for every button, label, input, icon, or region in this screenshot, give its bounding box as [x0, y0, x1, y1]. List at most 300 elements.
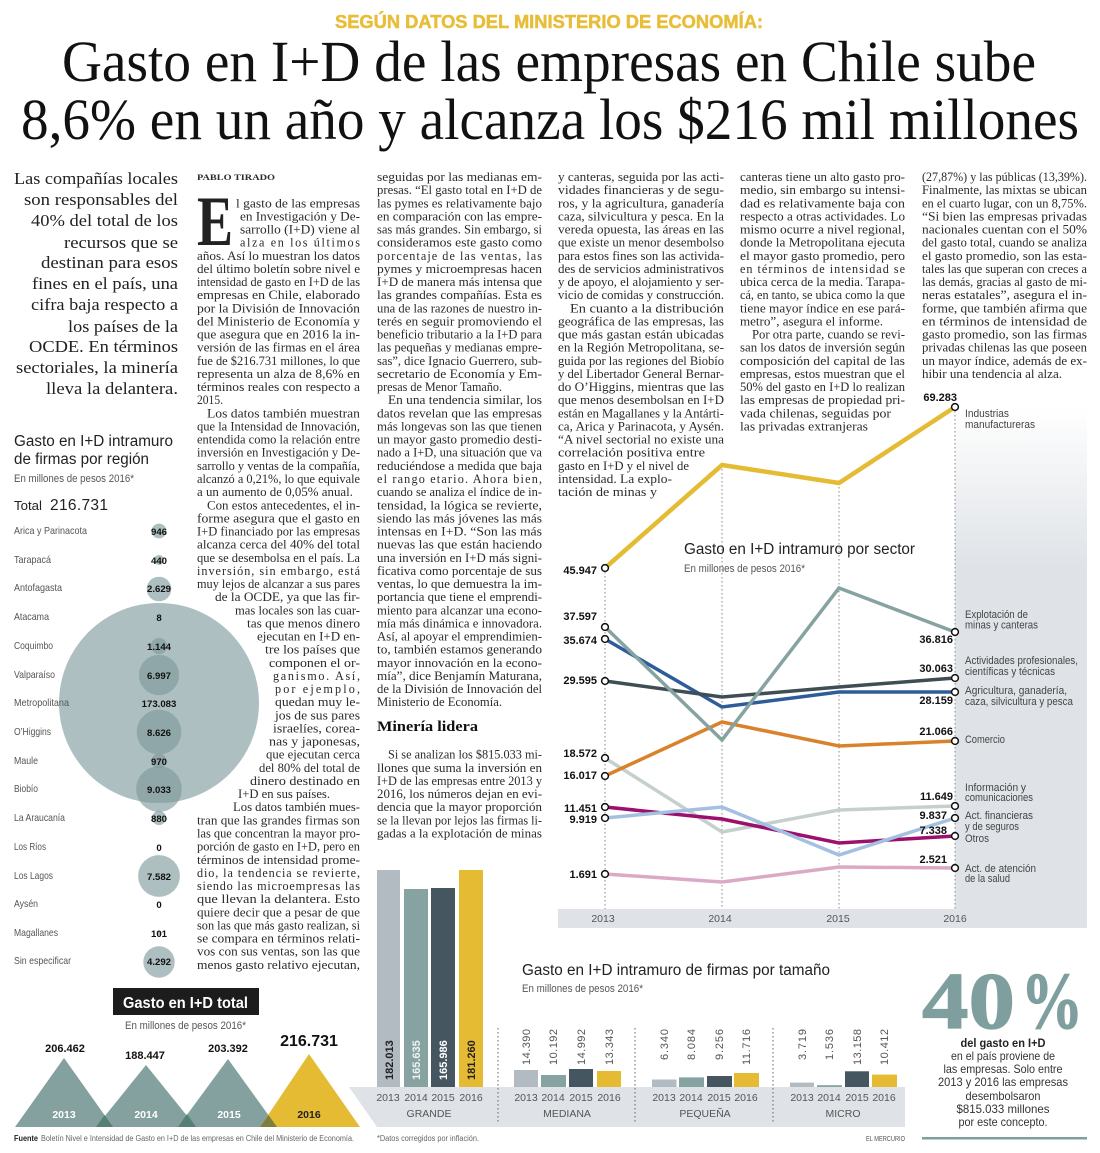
article column 5: (27,87%) y las públicas (13,39%).: [922, 170, 1087, 184]
article column 2: mayor innovación en la econo-: [377, 656, 542, 670]
size years and groups: 2014: [404, 1092, 428, 1104]
article column 5: el gasto promedio, son las esta-: [922, 249, 1087, 263]
article column 1: quiere decir que a pesar de que: [197, 905, 360, 919]
bars: micro: 3.719: [797, 1029, 809, 1060]
sector labels: comunicaciones: [965, 792, 1033, 804]
article column 4: Por otra parte, cuando se revi-: [752, 328, 905, 342]
size years and groups: 2016: [872, 1092, 896, 1104]
article column 1: componen el or-: [269, 656, 360, 670]
2016 values: 7.338: [919, 825, 947, 837]
article column 3: y canteras, seguida por las acti-: [558, 170, 724, 184]
bars: grande: 182.013: [384, 1040, 396, 1080]
sector labels: Act. financieras: [965, 810, 1033, 822]
panel: total spending triangles: [15, 988, 360, 1127]
article column 3: ros, y la agricultura, ganadería: [558, 196, 725, 210]
article column 2: I+D de las empresas entre 2013 y: [377, 774, 543, 788]
intro paragraph: cifra baja respecto a: [31, 295, 178, 314]
article column 5: un mayor índice, además de ex-: [922, 354, 1087, 368]
article column 4: mismo ocurre a nivel regional,: [740, 222, 905, 236]
article column 1: siendo las microempresas las: [197, 879, 360, 893]
article column 1: mas locales son las cuar-: [235, 603, 360, 617]
callout text: $815.033 millones: [956, 1102, 1050, 1116]
bars: grande: 165.986: [438, 1040, 450, 1080]
article column 2: el rango etario. Ahora bien,: [377, 472, 542, 486]
region values: 2.629: [147, 584, 171, 595]
region names: Sin especificar: [14, 955, 71, 967]
article column 1: las que concentran la mayor pro-: [197, 826, 360, 840]
article column 3: que existe un menor desembolso: [558, 236, 724, 250]
article column 4: respecto a otras actividades. Lo: [740, 209, 905, 223]
article column 2: una inversión en I+D más signi-: [377, 551, 542, 565]
bars: pequeña: 9.256: [714, 1029, 726, 1060]
sector labels: Actividades profesionales,: [965, 655, 1078, 667]
sector labels: Act. de atención: [965, 863, 1036, 875]
sector labels: y de seguros: [965, 821, 1019, 833]
intro paragraph: 40% del total de los: [31, 211, 178, 230]
total heading box: [113, 988, 259, 1015]
size years and groups: 2013: [376, 1092, 400, 1104]
article column 2: sas más grandes. Sin embargo, si: [377, 222, 543, 236]
article column 3: [558, 170, 725, 499]
article column 1: alza en los últimos: [240, 236, 360, 250]
series lines: [605, 407, 955, 882]
2013 values: 1.691: [569, 869, 597, 881]
region names: Valparaíso: [14, 669, 55, 681]
total values: 203.392: [208, 1043, 248, 1055]
region values: 0: [156, 843, 162, 854]
credit: EL MERCURIO: [866, 1136, 905, 1143]
region values: 0: [156, 900, 162, 911]
sector labels: manufactureras: [965, 419, 1035, 431]
article column 5: forme, que también afirma que: [922, 301, 1087, 315]
size years and groups: 2013: [652, 1092, 676, 1104]
article column 4: el mayor gasto promedio, pero: [740, 249, 905, 263]
2016 values: 21.066: [919, 726, 953, 738]
article column 2: las grandes compañías. Esta es: [377, 288, 542, 302]
callout text: del gasto en I+D: [960, 1036, 1046, 1050]
region total: [14, 497, 108, 514]
article column 4: vada chilenas, seguidas por: [740, 406, 891, 420]
region values: 4.292: [147, 957, 171, 968]
article column 1: ganismo. Así,: [273, 669, 360, 683]
bars: pequeña: [652, 1029, 759, 1087]
article column 4: cá, en tanto, se ubica como la que: [740, 288, 905, 302]
article column 3: intensidad. La explo-: [558, 472, 672, 486]
intro paragraph: recursos que se: [64, 233, 178, 252]
2013 values: 9.919: [569, 814, 597, 826]
big number: 40: [922, 958, 1015, 1046]
article column 2: reduciéndose a medida que baja: [377, 459, 543, 473]
article column 5: neras estatales”, asegura el in-: [922, 288, 1087, 302]
article column 1: del 80% del total de: [259, 761, 360, 775]
region names: Los Lagos: [14, 870, 53, 882]
article column 2: Así, al apoyar el emprendimien-: [377, 630, 542, 644]
2013 values: [563, 565, 598, 881]
region values: 440: [151, 556, 167, 567]
article column 5: “Si bien las empresas privadas: [922, 209, 1087, 223]
article column 1: alcanzó a 0,21%, lo que equivale: [197, 472, 360, 486]
group separators: [498, 1028, 773, 1122]
2013 values: 37.597: [563, 611, 597, 623]
sector labels: de la salud: [965, 873, 1010, 885]
region names: Los Ríos: [14, 841, 46, 853]
callout text: 2013 y 2016 las empresas: [938, 1075, 1068, 1089]
panel: sector line chart: [563, 392, 1078, 925]
article column 1: intensidad de gasto en I+D de las: [197, 275, 360, 289]
article column 2: dencia que la mayor proporción: [377, 800, 542, 814]
sector labels: Industrias: [965, 408, 1009, 420]
size years and groups: 2014: [817, 1092, 841, 1104]
article column 2: ventas, lo que demuestra la im-: [377, 577, 542, 591]
article column 3: “A nivel sectorial no existe una: [558, 433, 725, 447]
intro paragraph: OCDE. En términos: [29, 337, 178, 356]
article column 2: Ministerio de Economía.: [377, 695, 502, 709]
2016 values: 28.159: [919, 695, 953, 707]
article column 2: las pequeñas y medianas empre-: [377, 341, 542, 355]
article column 2: nado a I+D, una situación que va: [377, 446, 543, 460]
article column 2: presas de Menor Tamaño.: [377, 380, 502, 394]
region names: Antofagasta: [14, 582, 62, 594]
sector labels: científicas y técnicas: [965, 666, 1055, 678]
article column 3: en la Región Metropolitana, se-: [558, 341, 724, 355]
article column 1: se compara en términos relati-: [197, 932, 360, 946]
triangle years: 2013: [52, 1109, 76, 1121]
article column 1: fue de $216.731 millones, lo que: [197, 354, 360, 368]
article column 4: empresas, estos muestran que el: [740, 367, 906, 381]
region names: Aysén: [14, 898, 38, 910]
inflation note: *Datos corregidos por inflación.: [377, 1134, 479, 1143]
bars: grande: 181.260: [466, 1040, 478, 1080]
total subtitle: En millones de pesos 2016*: [125, 1020, 247, 1032]
sector labels: [965, 408, 1078, 885]
article column 5: Finalmente, las mixtas se ubican: [922, 183, 1087, 197]
triangle years: 2016: [297, 1109, 321, 1121]
article column 1: I+D financiado por las empresas: [197, 524, 360, 538]
article column 1: en Investigación y De-: [240, 209, 360, 223]
region values: 970: [151, 757, 167, 768]
region chart heading: [14, 433, 173, 468]
intro paragraph: lleva la delantera.: [46, 379, 178, 398]
article column 4: canteras tiene un alto gasto pro-: [740, 170, 905, 184]
article column 1: jos de sus pares: [274, 708, 360, 722]
article column 3: geográfica de las empresas, las: [558, 314, 724, 328]
intro paragraph: destinan para esos: [41, 253, 178, 272]
article column 3: caza, silvicultura y pesca. En la: [558, 209, 725, 223]
chart panel background: sector band: [558, 407, 1087, 928]
total values: 188.447: [125, 1050, 165, 1062]
size years and groups: 2013: [790, 1092, 814, 1104]
size chart subtitle: En millones de pesos 2016*: [522, 983, 644, 995]
base band: [349, 1087, 905, 1127]
article column 5: [922, 170, 1088, 381]
article column 2: consideramos este gasto como: [377, 236, 542, 250]
size years and groups: 2015: [845, 1092, 869, 1104]
size years and groups: 2014: [541, 1092, 565, 1104]
drop cap: E: [197, 183, 233, 261]
region values: 946: [151, 527, 167, 538]
sector year axis: 2016: [943, 913, 967, 925]
article column 2: llones que suma la inversión en: [377, 761, 542, 775]
region chart heading: de firmas por región: [14, 451, 149, 468]
article column 5: tales las que superan con creces a: [922, 262, 1088, 276]
article column 3: para estos fines son las activida-: [558, 249, 724, 263]
article column 3: do O’Higgins, mientras que las: [558, 380, 724, 394]
2013 values: 11.451: [564, 803, 597, 815]
article column 2: pymes y microempresas hacen: [377, 262, 542, 276]
sector year axis: [591, 913, 967, 925]
bars: micro: 13.158: [852, 1029, 864, 1065]
region values: 880: [151, 814, 167, 825]
article column 4: metro”, asegura el informe.: [740, 314, 883, 328]
sector labels: minas y canteras: [965, 620, 1038, 632]
bars: micro: 10.412: [879, 1029, 891, 1065]
source note: Fuente: [14, 1134, 38, 1143]
article column 1: muy lejos de alcanzar a sus pares: [197, 577, 360, 591]
size years and groups: 2015: [569, 1092, 593, 1104]
subheading: Minería lidera: Minería lidera: [377, 719, 479, 735]
article column 1: que se desembolsa en el país. La: [197, 551, 361, 565]
sector labels: Información y: [965, 782, 1026, 794]
article column 1: por ejemplo,: [275, 682, 360, 696]
article column 1: de la OCDE, ya que las fir-: [215, 590, 360, 604]
title: Gasto en I+D de las empresas en Chile sube: [62, 29, 1036, 94]
article column 4: en términos de intensidad se: [740, 262, 905, 276]
article column 1: del último boletín sobre nivel e: [197, 262, 360, 276]
article column 1: quedan muy le-: [275, 695, 360, 709]
size years and groups: MICRO: [826, 1108, 860, 1120]
article column 4: las privadas extranjeras: [740, 420, 868, 434]
article column 1: sarrollo (I+D) viene al: [240, 222, 361, 236]
bars: mediana: 10.192: [548, 1029, 560, 1065]
bars: mediana: 13.343: [604, 1029, 616, 1065]
article column 1: por la División de Innovación: [197, 301, 360, 315]
article column 1: años. Así lo muestran los datos: [197, 249, 360, 263]
triangle years: [52, 1109, 321, 1121]
article column 3: En cuanto a la distribución: [570, 301, 724, 315]
article column 2: gadas a la explotación de minas: [377, 826, 542, 840]
2016 values: 9.837: [919, 810, 947, 822]
article column 5: en el cuarto lugar, con un 8,75%.: [922, 196, 1087, 210]
callout text: por este concepto.: [958, 1115, 1048, 1129]
callout: 40%: [922, 958, 1087, 1140]
size years and groups: 2013: [514, 1092, 538, 1104]
bars: pequeña: 11.716: [741, 1029, 753, 1065]
panel: region bubble chart: [14, 433, 259, 978]
article column 4: dad es relativamente baja con: [740, 196, 905, 210]
region names: Atacama: [14, 611, 49, 623]
article column 1: tre los países que: [265, 643, 360, 657]
sector labels: Explotación de: [965, 609, 1028, 621]
2016 values: 30.063: [919, 663, 953, 675]
article column 1: dinero destinado en: [250, 774, 360, 788]
article column 2: I+D de manera más intensa que: [377, 275, 542, 289]
triangle years: 2014: [134, 1109, 158, 1121]
article column 2: secretario de Economía y Em-: [377, 367, 542, 381]
size years and groups: 2016: [734, 1092, 758, 1104]
article column 1: l gasto de las empresas: [236, 196, 360, 210]
total heading box: Gasto en I+D total: [123, 995, 248, 1012]
size years and groups: 2014: [679, 1092, 703, 1104]
2016 values: 69.283: [923, 392, 957, 404]
bars: pequeña: 6.340: [659, 1029, 671, 1060]
region values: 9.033: [147, 785, 171, 796]
intro paragraph: fines en el país, una: [32, 274, 178, 293]
triangle years: 2015: [217, 1109, 241, 1121]
article column 1: Los datos también muestran: [207, 406, 360, 420]
bars: pequeña: 8.084: [686, 1029, 698, 1060]
bars: micro: [790, 1029, 897, 1087]
bars: micro: 1.536: [824, 1029, 836, 1060]
article column 4: medio, sin embargo su intensi-: [740, 183, 905, 197]
title: [21, 29, 1079, 152]
article column 2: beneficio tributario a la I+D para: [377, 328, 543, 342]
article column 1: del Ministerio de Economía y: [197, 314, 361, 328]
article column 3: vicio de comidas y construcción.: [558, 288, 724, 302]
intro paragraph: los países de la: [68, 317, 178, 336]
article column 1: que asegura que en 2016 la in-: [197, 328, 360, 342]
article column 2: en comparación con las empre-: [377, 209, 542, 223]
article column 2: ficativa como porcentaje de sus: [377, 564, 542, 578]
intro paragraph: sectoriales, la minería: [16, 358, 178, 377]
size years and groups: [376, 1092, 896, 1120]
region values: 101: [151, 929, 168, 940]
article column 2: intensas en I+D. “Son las más: [377, 524, 542, 538]
article column 3: tación de minas y: [558, 485, 658, 499]
byline: PABLO TIRADO: [197, 172, 275, 182]
sector chart subtitle: En millones de pesos 2016*: [684, 563, 806, 575]
article column 1: Los datos también mues-: [233, 800, 360, 814]
article column 4: composición del capital de las: [740, 354, 905, 368]
bubbles: [59, 524, 259, 978]
article column 3: correlación positiva entre: [558, 446, 705, 460]
region values: [142, 527, 176, 968]
article column 1: porción de gasto en I+D, pero en: [197, 840, 360, 854]
total values: [45, 1033, 338, 1062]
2013 values: 29.595: [563, 675, 597, 687]
2013 values: 16.017: [563, 770, 597, 782]
article column 4: tiene mayor índice en ese pará-: [740, 301, 905, 315]
article column 2: un mayor gasto promedio desti-: [377, 433, 542, 447]
region names: Coquimbo: [14, 640, 53, 652]
article column 3: guida por las regiones del Biobío: [558, 354, 724, 368]
article column 1: tran que las grandes firmas son: [197, 813, 360, 827]
article column 3: vidades financieras y de segu-: [558, 183, 724, 197]
region chart heading: Gasto en I+D intramuro: [14, 433, 173, 450]
article column 1: nas y japonesas,: [269, 735, 360, 749]
title: 8,6% en un año y alcanza los $216 mil millones: [21, 87, 1079, 152]
article column 1: tas que menos dinero: [247, 616, 360, 630]
article column 5: nacionales cuentan con el 50%: [922, 222, 1087, 236]
sector year axis: 2015: [826, 913, 850, 925]
total values: 206.462: [45, 1043, 85, 1055]
article column 2: presas. “El gasto total en I+D de: [377, 183, 542, 197]
article column 2: Si se analizan los $815.033 mi-: [388, 748, 542, 762]
article column 1: ejecutan en I+D en-: [257, 630, 360, 644]
region values: 8.626: [147, 728, 171, 739]
bars: grande: 165.635: [411, 1040, 423, 1080]
callout text: [938, 1036, 1068, 1129]
article column 2: mía más dinámica e innovadora.: [377, 616, 542, 630]
article column 1: forme asegura que el gasto en: [197, 511, 360, 525]
article column 2: tensidad, la lógica se revierte,: [377, 498, 542, 512]
article column 4: donde la Metropolitana ejecuta: [740, 236, 906, 250]
region names: Arica y Parinacota: [14, 525, 87, 537]
article column 4: 50% del gasto en I+D lo realizan: [740, 380, 905, 394]
region values: 173.083: [142, 699, 176, 710]
sector year axis: 2013: [591, 913, 615, 925]
article column 2: mía”, dice Benjamín Maturana,: [377, 669, 542, 683]
article column 2: 2016, los números dejan en evi-: [377, 787, 542, 801]
bars: grande: [377, 870, 483, 1087]
article column 1: israelíes, corea-: [273, 722, 360, 736]
data markers: [602, 404, 958, 877]
article column 1: menos gasto relativo ejecutan,: [197, 958, 360, 972]
2016 values: 11.649: [920, 791, 953, 803]
article column 3: y del Libertador General Bernar-: [558, 367, 724, 381]
article column 3: gasto en I+D y el nivel de: [558, 459, 689, 473]
region chart subtitle: En millones de pesos 2016*: [14, 473, 135, 485]
size years and groups: MEDIANA: [543, 1108, 591, 1120]
article column 2: sas”, dice Ignacio Guerrero, sub-: [377, 354, 542, 368]
article column 5: las demás, gracias al gasto de mi-: [922, 275, 1087, 289]
sector labels: Otros: [965, 833, 989, 845]
article column 4: san los datos de inversión según: [740, 341, 905, 355]
article column 2: nuevas las que están haciendo: [377, 538, 542, 552]
article column 1: a un aumento de 0,05% anual.: [197, 485, 353, 499]
2016 values: 36.816: [919, 634, 953, 646]
intro paragraph: son responsables del: [24, 190, 178, 209]
sector labels: caza, silvicultura y pesca: [965, 696, 1074, 708]
article column 1: sarrollo y ventas de la compañía,: [197, 459, 360, 473]
article column 4: ubica cerca de la media. Tarapa-: [740, 275, 905, 289]
article column 5: hibir una tendencia al alza.: [922, 367, 1062, 381]
article column 1: [197, 172, 361, 972]
sector labels: Agricultura, ganadería,: [965, 685, 1067, 697]
article column 2: En una tendencia similar, los: [388, 393, 542, 407]
article column 1: representa un alza de 8,6% en: [197, 367, 360, 381]
region names: Magallanes: [14, 927, 58, 939]
article column 1: inversión, sin embargo, está: [197, 564, 361, 578]
article column 1: empresas en Chile, elaborado: [197, 288, 360, 302]
2016 values: 2.521: [919, 854, 947, 866]
article column 3: ca, Arica y Parinacota, y Aysén.: [558, 420, 724, 434]
article column 2: seguidas por las medianas em-: [377, 170, 542, 184]
size years and groups: GRANDE: [407, 1108, 451, 1120]
article column 1: entendida como la relación entre: [197, 433, 360, 447]
big number: [922, 958, 1083, 1046]
article column 1: Con estos antecedentes, el in-: [207, 498, 360, 512]
region total: Total: [14, 498, 42, 513]
article column 1: dio, la tendencia se revierte,: [197, 866, 360, 880]
article column 1: son las que más gasto realizan, si: [197, 918, 361, 932]
region names: Metropolitana: [14, 697, 69, 709]
size years and groups: 2016: [459, 1092, 483, 1104]
article column 2: se la llevan por lejos las firmas li-: [377, 813, 542, 827]
article column 5: del gasto total, cuando se analiza: [922, 236, 1088, 250]
triangles: [15, 1054, 360, 1127]
article column 2: de la División de Innovación del: [377, 682, 543, 696]
article column 1: I+D en sus países.: [238, 787, 330, 801]
region values: 7.582: [147, 872, 171, 883]
region names: Tarapacá: [14, 554, 51, 566]
article column 2: porcentaje de las ventas, las: [377, 249, 542, 263]
2013 values: 18.572: [563, 748, 597, 760]
source note: Boletín Nivel e Intensidad de Gasto en I+D de las empresas en Chile del Ministerio de Economía.: [41, 1134, 354, 1143]
callout text: desembolsaron: [966, 1089, 1040, 1103]
article column 2: las pymes es relativamente bajo: [377, 196, 542, 210]
region total: 216.731: [50, 497, 108, 514]
article column 3: des de servicios administrativos: [558, 262, 724, 276]
